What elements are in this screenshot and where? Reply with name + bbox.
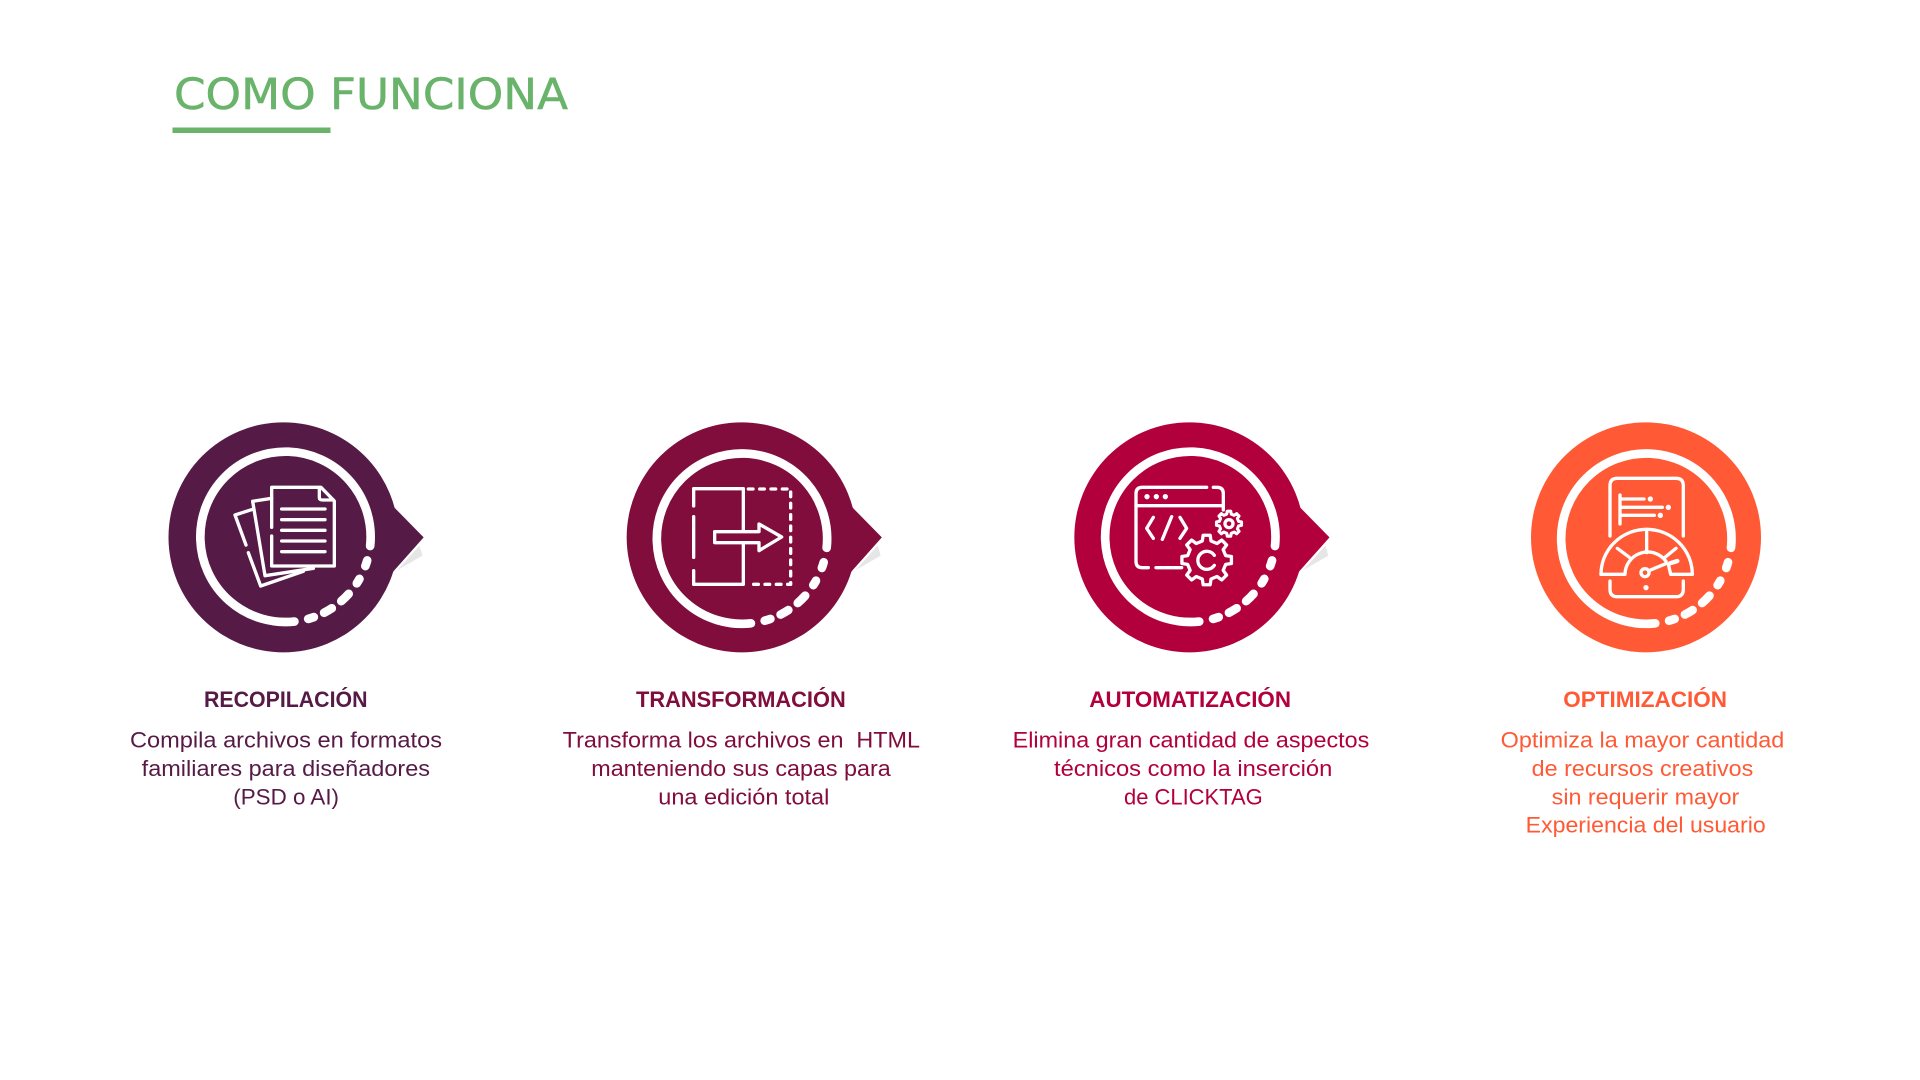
icon: speed gauge on page — [1601, 478, 1692, 597]
panel: optimización — [1501, 422, 1784, 837]
heading: optimización: OPTIMIZACIÓN — [1563, 687, 1727, 712]
icon: layer transform arrow — [694, 489, 791, 584]
text: transformación description: manteniendo sus capas para — [591, 756, 891, 781]
heading: transformación: TRANSFORMACIÓN — [636, 687, 846, 712]
dashed progress ring — [1105, 452, 1275, 622]
badge 2 — [627, 422, 882, 652]
text: automatización description: Elimina gran cantidad de aspectos — [1013, 727, 1369, 752]
text: recopilación description — [130, 727, 442, 809]
badge 1 — [168, 422, 424, 652]
panel: transformación — [563, 422, 920, 809]
text: automatización description — [1013, 727, 1369, 809]
dashed progress ring — [1561, 453, 1731, 624]
heading: recopilación: RECOPILACIÓN — [204, 687, 368, 712]
title underline — [172, 128, 330, 133]
panel: automatización — [1013, 422, 1369, 809]
panel: recopilación — [130, 422, 442, 809]
badge 4 — [1531, 422, 1761, 652]
dashed progress ring — [657, 453, 827, 624]
dashed progress ring — [200, 452, 371, 622]
heading: automatización: AUTOMATIZACIÓN — [1089, 687, 1291, 712]
text: optimización description: de recursos creativos — [1532, 756, 1753, 781]
text: automatización description: de CLICKTAG — [1124, 784, 1263, 809]
text: optimización description — [1501, 727, 1784, 837]
text: recopilación description: familiares para diseñadores — [142, 756, 430, 781]
text: optimización description: Optimiza la mayor cantidad — [1501, 727, 1784, 752]
text: optimización description: sin requerir mayor — [1552, 784, 1740, 809]
text: transformación description: una edición total — [658, 784, 829, 809]
badge 3 — [1074, 422, 1329, 652]
text: automatización description: técnicos como la inserción — [1054, 756, 1332, 781]
text: recopilación description: Compila archivos en formatos — [130, 727, 442, 752]
text: transformación description — [563, 727, 920, 809]
text: transformación description: Transforma los archivos en HTML — [563, 727, 920, 752]
text: recopilación description: (PSD o AI) — [233, 784, 339, 809]
icon: code window with gears — [1136, 487, 1242, 585]
icon: documents — [235, 487, 334, 586]
text: optimización description: Experiencia del usuario — [1526, 812, 1766, 837]
title: COMO FUNCIONA — [174, 71, 568, 120]
